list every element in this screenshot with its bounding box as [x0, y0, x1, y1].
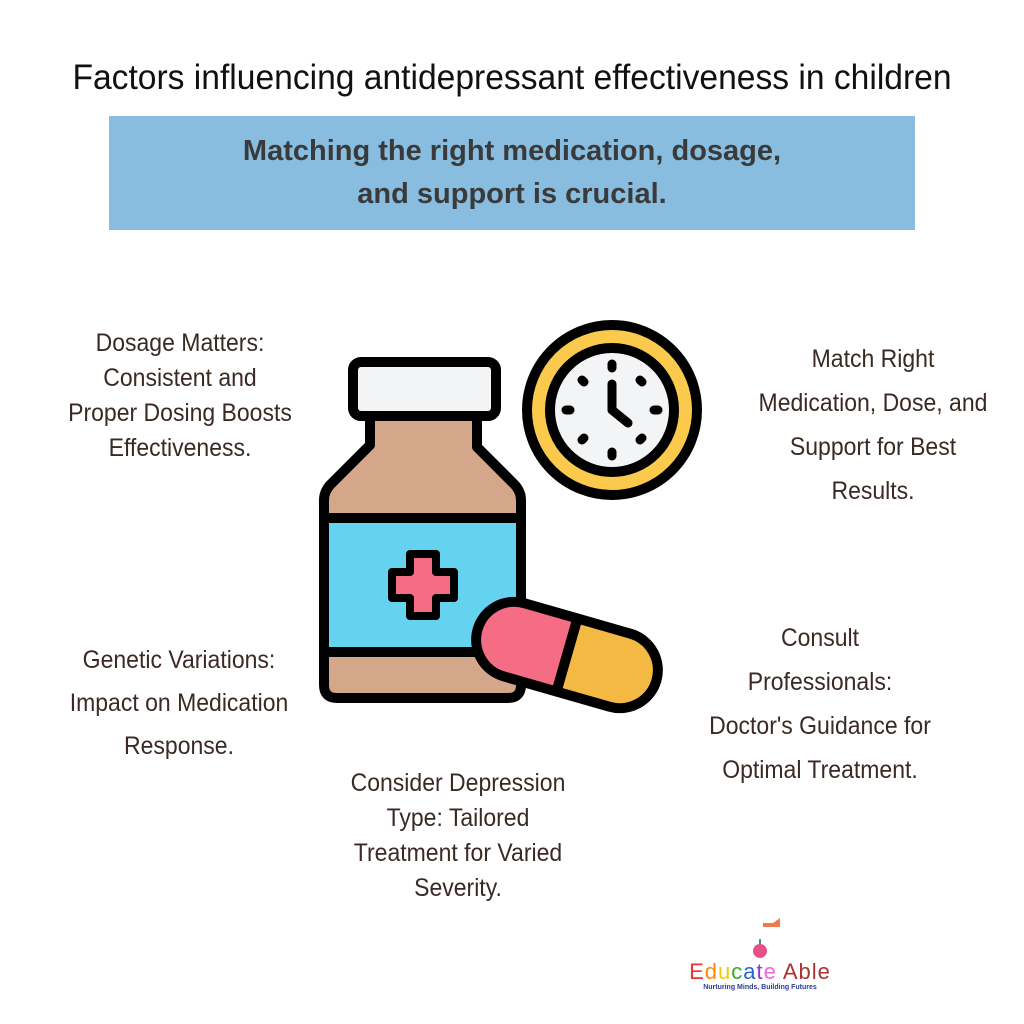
text: genetic: Genetic Variations:: [83, 646, 275, 674]
icon: bottle: [324, 362, 521, 698]
text: dosage: Dosage Matters:: [96, 329, 264, 357]
text: depression type: Severity.: [414, 874, 502, 902]
text: consult: [709, 624, 931, 784]
text: consult: Consult: [781, 624, 859, 652]
text: match: Results.: [831, 477, 915, 505]
title: Factors influencing antidepressant effectiveness in children: [72, 58, 952, 97]
text: consult: Optimal Treatment.: [722, 756, 918, 784]
text: dosage: [68, 329, 292, 462]
text: match: [759, 345, 987, 505]
text: genetic: [70, 646, 288, 760]
logo text: Educate Able: [689, 959, 831, 984]
text: depression type: Type: Tailored: [387, 804, 529, 832]
text: genetic: Response.: [124, 732, 234, 760]
text: match: Medication, Dose, and: [759, 389, 987, 417]
logo: [689, 918, 831, 991]
text: consult: Professionals:: [748, 668, 892, 696]
icon: logo plant: [753, 918, 780, 958]
text: genetic: Impact on Medication: [70, 689, 288, 717]
text: match: Match Right: [812, 345, 934, 373]
text: dosage: Consistent and: [103, 364, 257, 392]
text: dosage: Proper Dosing Boosts: [68, 399, 292, 427]
text: depression type: Treatment for Varied: [354, 839, 562, 867]
icon: pill: [467, 593, 667, 717]
logo: Nurturing Minds, Building Futures: [703, 984, 817, 991]
text: dosage: Effectiveness.: [109, 434, 251, 462]
banner: [109, 116, 915, 230]
icon: clock: [527, 325, 697, 495]
text: consult: Doctor's Guidance for: [709, 712, 931, 740]
text: match: Support for Best: [790, 433, 956, 461]
banner: and support is crucial.: [357, 178, 667, 210]
text: depression type: [351, 769, 565, 902]
text: depression type: Consider Depression: [351, 769, 565, 797]
banner: Matching the right medication, dosage,: [243, 135, 781, 167]
